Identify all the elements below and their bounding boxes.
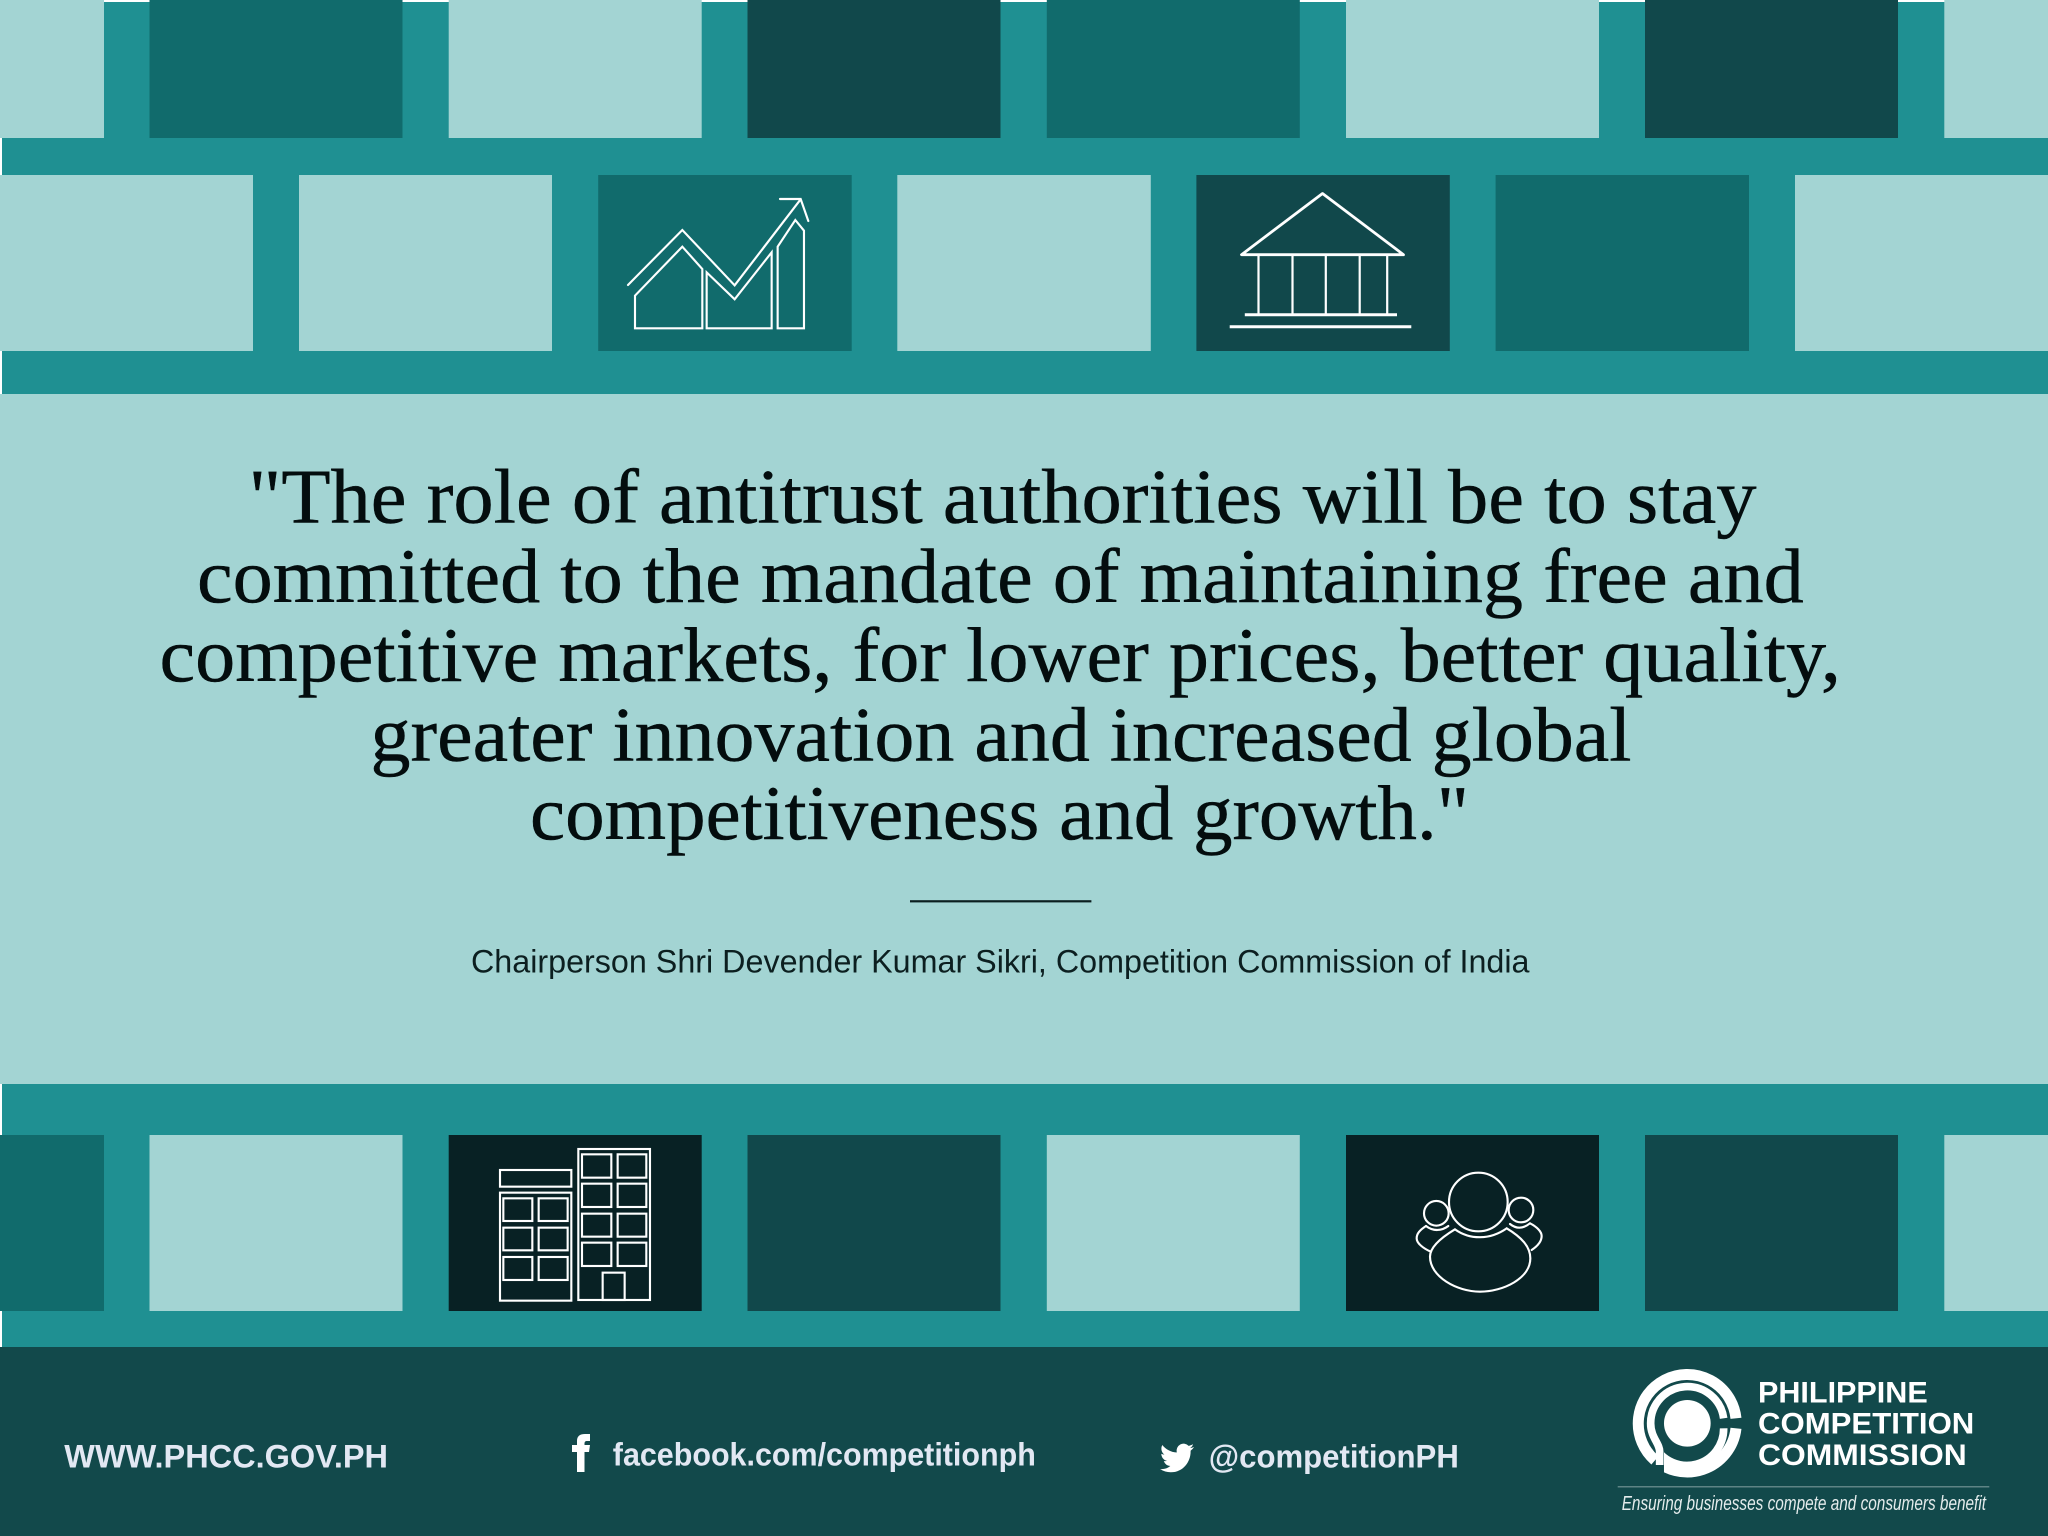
icon: twitter bird [1160, 1444, 1194, 1472]
quote text: greater innovation and increased global [370, 691, 1632, 777]
logo divider [1618, 1486, 1989, 1488]
quote text [160, 454, 1841, 856]
panel: bottom tile band [0, 1084, 2048, 1347]
logo wordmark [1758, 1376, 1974, 1472]
logo wordmark: COMPETITION [1758, 1407, 1974, 1440]
panel: top tile band [0, 0, 2048, 394]
facebook handle: facebook.com/competitionph [613, 1437, 1036, 1473]
icon: institution building [1230, 194, 1411, 327]
quote text: competitive markets, for lower prices, better quality, [160, 612, 1841, 698]
panel: quote background [0, 394, 2048, 1084]
logo wordmark: PHILIPPINE [1758, 1376, 1928, 1409]
quote text: competitiveness and growth." [530, 770, 1469, 856]
icon: group of people [1417, 1173, 1542, 1292]
divider rule [910, 900, 1091, 902]
icon: office buildings [500, 1149, 650, 1301]
logo mark [1638, 1374, 1736, 1472]
panel: footer [0, 1347, 2048, 1536]
attribution: Chairperson Shri Devender Kumar Sikri, Competition Commission of India [471, 944, 1530, 980]
twitter handle: @competitionPH [1209, 1438, 1459, 1474]
quote text: committed to the mandate of maintaining free and [197, 533, 1804, 619]
website link: WWW.PHCC.GOV.PH [64, 1439, 388, 1475]
icon: rising chart [628, 199, 808, 328]
icon: facebook [572, 1434, 590, 1472]
quote text: "The role of antitrust authorities will be to stay [248, 454, 1757, 540]
logo wordmark: COMMISSION [1758, 1439, 1967, 1472]
